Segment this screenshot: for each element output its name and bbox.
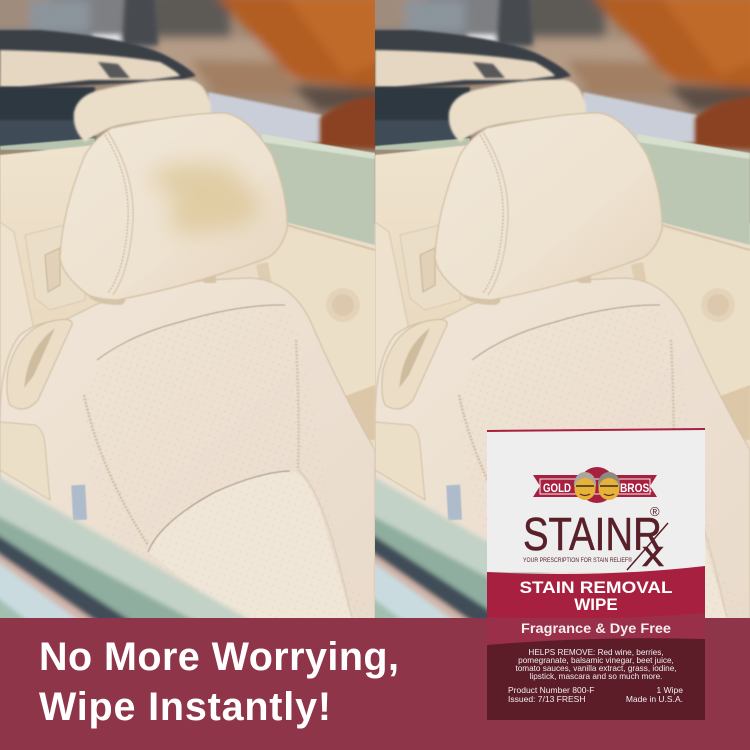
headline: No More Worrying,: [39, 635, 399, 679]
packet subtitle: Fragrance & Dye Free: [521, 620, 671, 636]
StainRx wordmark: STAIN: [523, 508, 633, 560]
packet fine print: tomato sauces, vanilla extract, grass, iodine,: [515, 664, 677, 673]
packet product details: [508, 685, 683, 704]
packet fine print: pomegranate, balsamic vinegar, beet juice,: [518, 656, 674, 665]
icon: two cartoon faces: [574, 472, 620, 500]
packet title: [520, 578, 672, 614]
packet fine print: HELPS REMOVE: Red wine, berries,: [528, 648, 664, 657]
StainRx wordmark: ®: [650, 504, 660, 519]
banner background: [0, 618, 750, 750]
panel: after photo with clean headrest: [365, 0, 750, 630]
stain on headrest: [150, 164, 260, 235]
panel: before photo with stained headrest: [0, 0, 385, 630]
product packet: Stain Rx wipe: [487, 429, 705, 720]
StainRx wordmark: x: [642, 533, 664, 574]
packet product details: Product Number 800-F: [508, 685, 594, 695]
Gold Bros logo banner: BROS.: [620, 481, 652, 495]
packet fine print: lipstick, mascara and so much more.: [530, 672, 662, 681]
Gold Bros logo banner: [533, 467, 657, 503]
Gold Bros logo banner: GOLD: [543, 481, 571, 495]
packet product details: Made in U.S.A.: [626, 694, 683, 704]
packet title: STAIN REMOVAL: [520, 578, 672, 597]
headline: Wipe Instantly!: [39, 685, 331, 729]
headline: [39, 635, 399, 729]
StainRx wordmark: R: [633, 508, 662, 560]
packet product details: Issued: 7/13 FRESH: [508, 694, 585, 704]
StainRx wordmark: [523, 504, 668, 574]
StainRx wordmark: YOUR PRESCRIPTION FOR STAIN RELIEF®: [523, 557, 633, 564]
packet title: WIPE: [574, 595, 618, 614]
packet fine print: [515, 648, 677, 681]
packet product details: 1 Wipe: [657, 685, 683, 695]
